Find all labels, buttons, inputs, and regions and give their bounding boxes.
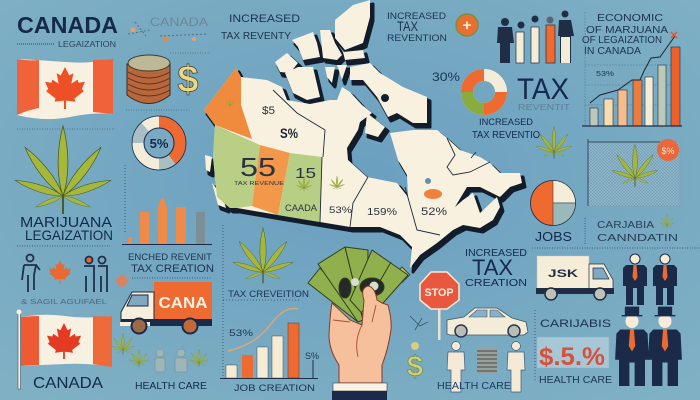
lake on Baffin <box>381 94 389 102</box>
labels: cannabis: CANNDATIN <box>597 233 678 244</box>
map labels: 53% <box>329 205 352 215</box>
icon: stop sign: STOP <box>424 287 454 299</box>
labels: increased tax revenue top: INCREASED <box>229 13 300 25</box>
map labels: TAX REVENUE <box>234 181 285 187</box>
heading: marijuana legalization: LEGAIZATION <box>25 227 113 243</box>
heading: economic of marijuana: ECONOMIC <box>597 12 663 24</box>
icon: large cannabis leaf <box>14 126 112 214</box>
icon: yellow road sign <box>394 267 410 282</box>
heading: economic of marijuana <box>582 12 668 57</box>
labels: increased tax creation <box>465 248 527 289</box>
labels: increased tax creation: TAX <box>472 255 513 280</box>
donut chart: tax revenue <box>467 75 501 109</box>
faded Canada label: CANADA <box>150 15 208 29</box>
label: TAX revenue: TAX <box>517 73 569 106</box>
map labels: $5 <box>262 105 275 117</box>
icon: orange diamond <box>115 274 129 288</box>
label: increased tax reventio: TAX REVENTIO <box>472 130 540 141</box>
icon: delivery truck Cana: CANA <box>158 295 208 312</box>
icon: plus badge <box>456 14 478 36</box>
province: British Columbia <box>213 125 260 208</box>
flag: Canada top <box>17 59 113 119</box>
labels: increased tax revention: TAX <box>397 18 419 34</box>
province: Saskatchewan <box>278 153 322 222</box>
map shadow <box>207 4 525 272</box>
heading: economic of marijuana: OF LEGAIZATION <box>582 35 662 46</box>
donut chart: 5% <box>132 116 186 170</box>
title: Canada legalization: LEGAIZATION <box>58 40 116 49</box>
labels: increased tax creation: CREATION <box>465 278 527 289</box>
label: carijabis: CARIJABIS <box>540 318 611 330</box>
map labels: S% <box>280 125 298 141</box>
bar chart: left <box>122 198 212 244</box>
panel: fenced leaf <box>588 139 680 206</box>
icon: people and maple leaf <box>22 254 107 292</box>
labels: increased tax revenue top: TAX REVENTY <box>221 31 291 42</box>
label: jobs: JOBS <box>535 229 572 244</box>
label: tax creveition: TAX CREVEITION <box>228 289 309 300</box>
map labels: 52% <box>421 206 447 218</box>
province: Alberta <box>252 145 290 215</box>
map labels: 55 <box>240 152 276 182</box>
label: tax creation: TAX CREATION <box>131 263 214 275</box>
map labels: 159% <box>367 207 397 218</box>
map labels: 15 <box>295 165 316 182</box>
map leaves and marker <box>226 99 442 199</box>
icons: people and coins <box>447 342 525 392</box>
heading: economic of marijuana: OF MARJUANA <box>586 25 668 36</box>
label: increased tax reventio: INCREASED <box>479 117 534 127</box>
icon: stop sign <box>420 272 459 340</box>
labels: increased tax creation: INCREASED <box>465 248 527 259</box>
money fan <box>308 247 408 322</box>
line and bar chart: economic: 53% <box>596 71 614 78</box>
people with bars <box>497 10 574 63</box>
labels: increased tax revention: INCREASED <box>387 11 446 22</box>
heading: marijuana legalization <box>20 214 113 243</box>
map labels <box>234 105 447 218</box>
icon: small cannabis leaf <box>536 126 572 159</box>
label: tax creation: ENCHED REVENIT <box>128 252 213 262</box>
icon: tiny leaf <box>660 214 674 228</box>
line and bar chart: economic <box>582 12 682 126</box>
icons: suited people top <box>623 254 677 305</box>
heading: economic of marijuana: IN CANADA <box>584 46 641 57</box>
panel: fenced leaf: $% <box>661 146 675 156</box>
illustration: hand with money <box>308 247 408 400</box>
icon: truck JSK <box>536 256 614 300</box>
icon: dollar sign: $ <box>177 59 199 101</box>
icon: truck JSK: JSK <box>548 268 578 280</box>
donut chart: 5%: 5% <box>150 136 169 151</box>
label: tax creation <box>128 252 214 275</box>
map labels: CAADA <box>285 203 317 213</box>
bar chart: job creation: 53% <box>229 328 253 338</box>
flag: Canada with pole <box>16 310 112 389</box>
icons: hat people <box>615 307 682 386</box>
labels: increased tax revention <box>387 11 447 44</box>
province: Yukon <box>204 68 252 139</box>
icon: car <box>447 308 528 337</box>
label: job creation: JOB CREATION <box>234 383 315 394</box>
label: increased tax reventio <box>472 117 540 141</box>
icon: medium cannabis leaf <box>232 228 294 283</box>
labels: cannabis <box>597 220 678 244</box>
label: Canada: CANADA <box>33 375 104 392</box>
label: health care middle: HEALTH CARE <box>437 381 511 392</box>
labels: increased tax revention: REVENTION <box>387 33 447 44</box>
heading: marijuana legalization: MARIJUANA <box>20 214 112 231</box>
title: Canada legalization <box>17 12 118 49</box>
hand <box>329 286 391 383</box>
bar chart: job creation <box>220 300 319 378</box>
pie chart: jobs <box>530 180 576 226</box>
icon: dollar and squiggle: $ <box>407 351 423 383</box>
panel: price: $.5.% <box>539 343 605 371</box>
labels: cannabis: CARJABIA <box>597 220 654 231</box>
title: Canada legalization: CANADA <box>17 12 118 38</box>
icon: plus badge: + <box>463 17 472 34</box>
labels: increased tax revenue top <box>221 13 300 42</box>
label: health care left: HEALTH CARE <box>135 381 207 392</box>
icon: delivery truck Cana <box>120 282 212 334</box>
label: health care right: HEALTH CARE <box>539 375 612 386</box>
icon: dollar and squiggle <box>407 316 428 383</box>
faded Canada label <box>128 15 208 42</box>
cuff and sleeve <box>333 383 387 391</box>
icon: coin stack <box>127 55 170 104</box>
label: TAX revenue: REVENTIT <box>518 103 570 112</box>
icons: health care leaves and people <box>111 333 209 372</box>
caption: people: & SAGIL AGUIFAEL <box>21 297 107 306</box>
bar chart: job creation: S% <box>305 351 319 361</box>
map of Canada <box>204 0 525 272</box>
value: 30%: 30% <box>432 70 460 84</box>
map landmass <box>204 0 522 268</box>
